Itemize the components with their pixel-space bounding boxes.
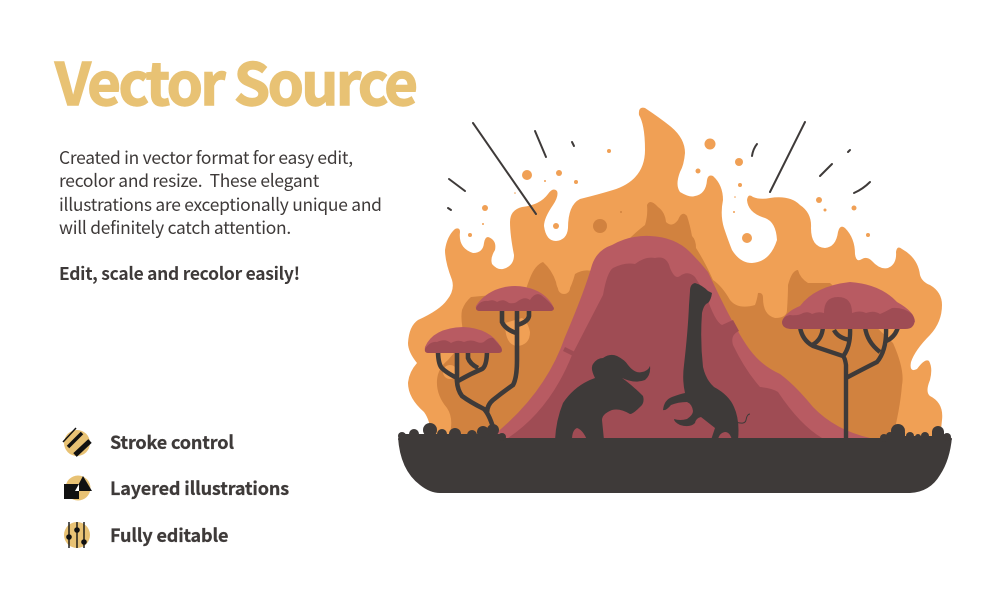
tree: right <box>782 282 915 438</box>
animal: bull silhouette <box>555 355 650 440</box>
description text: will definitely catch attention. <box>59 215 291 240</box>
light flame drips <box>505 318 530 346</box>
illustration: volcano eruption with animals <box>398 108 952 493</box>
description text: recolor and resize. These elegant <box>59 168 319 193</box>
feature label: layered illustrations: Layered illustrations <box>110 475 289 501</box>
volcano <box>490 236 870 438</box>
dark flame spot <box>593 219 607 233</box>
inner dark flames <box>437 202 903 440</box>
feature label: stroke control: Stroke control <box>110 429 234 455</box>
feature label: fully editable: Fully editable <box>110 522 228 548</box>
giraffe tail <box>736 414 750 423</box>
volcano inner slope <box>508 257 822 438</box>
title: Vector Source <box>55 38 415 122</box>
flames <box>408 108 942 440</box>
description text <box>59 145 382 240</box>
animal: giraffe silhouette <box>663 283 738 440</box>
sparks: dark lines <box>448 122 870 214</box>
sparks: ember dots <box>468 138 870 243</box>
icon: sliders <box>64 522 90 548</box>
icon: stroke control <box>63 428 90 456</box>
icon: layered shapes <box>64 476 92 500</box>
ground <box>398 423 952 493</box>
description text: illustrations are exceptionally unique and <box>59 192 382 217</box>
description text: Created in vector format for easy edit, <box>59 145 353 170</box>
tree: tall left <box>476 286 554 413</box>
call to action text: Edit, scale and recolor easily! <box>59 261 300 286</box>
tree: small left <box>425 327 502 434</box>
